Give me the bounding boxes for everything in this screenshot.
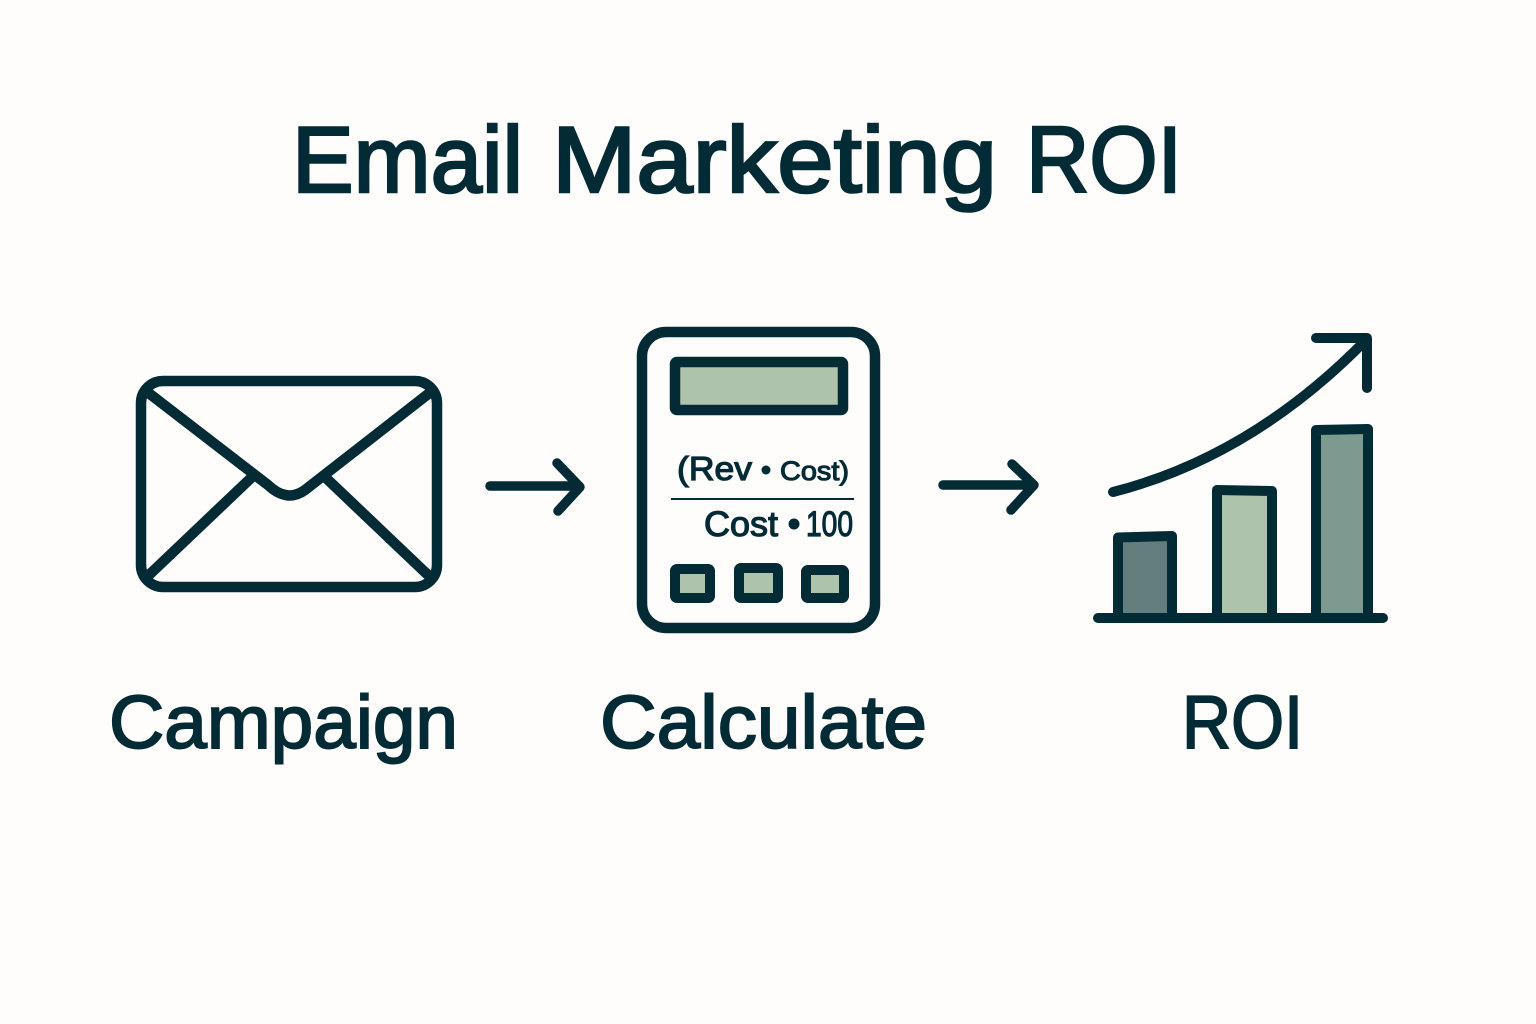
bar 3 bbox=[1316, 429, 1368, 618]
title: Email bbox=[292, 107, 523, 212]
formula divider bbox=[671, 498, 854, 500]
arrow: calculate to ROI bbox=[943, 464, 1034, 510]
formula denominator bbox=[704, 505, 853, 544]
formula denominator: Cost bbox=[704, 505, 778, 544]
rising trend arrow bbox=[1113, 338, 1367, 492]
title: ROI bbox=[1026, 107, 1182, 212]
icon: envelope bbox=[141, 381, 437, 587]
formula numerator: (Rev bbox=[677, 450, 753, 487]
calculator screen bbox=[675, 362, 843, 410]
bar 1 bbox=[1118, 536, 1172, 618]
arrow: campaign to calculate bbox=[490, 463, 580, 511]
calculator body bbox=[642, 332, 875, 628]
bar 2 bbox=[1217, 490, 1272, 618]
formula denominator: 100 bbox=[806, 505, 853, 544]
title: Marketing bbox=[552, 107, 997, 212]
formula numerator bbox=[677, 450, 849, 487]
label: Calculate: Calculate bbox=[600, 680, 927, 764]
label: ROI: ROI bbox=[1182, 680, 1303, 764]
chart baseline bbox=[1098, 613, 1383, 623]
label: Campaign: Campaign bbox=[109, 680, 458, 764]
icon: calculator bbox=[642, 332, 875, 628]
formula numerator: Cost) bbox=[780, 456, 849, 486]
icon: growth chart bbox=[1098, 338, 1383, 618]
calculator buttons bbox=[675, 568, 844, 598]
